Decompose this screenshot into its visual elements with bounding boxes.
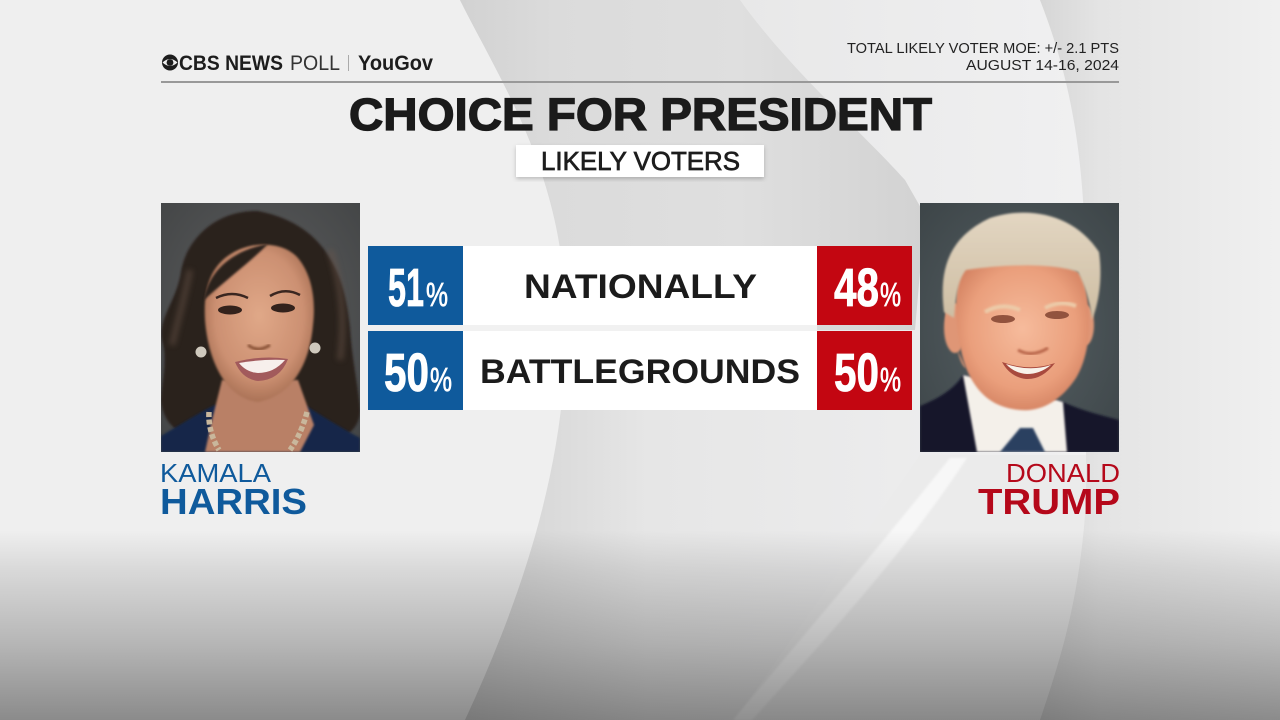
Trump national result (817, 246, 912, 325)
candidate name: Donald Trump: TRUMP (978, 481, 1120, 522)
poll details (847, 41, 1119, 74)
candidate name: Kamala Harris (160, 458, 307, 522)
CBS News label: CBS NEWS (179, 52, 283, 75)
Harris battleground result: 50 (384, 343, 429, 403)
row: battlegrounds (368, 331, 912, 410)
title: CHOICE FOR PRESIDENT (349, 89, 932, 140)
candidate name: Donald Trump (978, 458, 1120, 522)
Harris national result (368, 246, 463, 325)
Trump battleground result: % (880, 361, 901, 398)
Harris battleground result (368, 331, 463, 410)
Trump national result: % (880, 276, 901, 313)
icon: CBS eye (162, 54, 178, 70)
poll details: AUGUST 14-16, 2024 (966, 58, 1119, 74)
candidate name: Kamala Harris: KAMALA (160, 458, 272, 488)
Harris national result: % (426, 276, 448, 313)
Trump battleground result (817, 331, 912, 410)
Trump battleground result: 50 (834, 343, 879, 403)
subtitle badge: likely voters: LIKELY VOTERS (541, 146, 740, 176)
Harris national result: 51 (388, 258, 424, 318)
Poll label: POLL (290, 52, 340, 75)
row label: nationally: NATIONALLY (524, 268, 757, 306)
portrait: Donald Trump (920, 203, 1119, 452)
portrait: Kamala Harris (161, 203, 360, 452)
Harris battleground result: % (430, 361, 452, 398)
header logo: CBS News Poll and YouGov (162, 52, 433, 75)
results table (368, 246, 912, 410)
candidate name: Donald Trump: DONALD (1006, 458, 1120, 488)
Trump national result: 48 (834, 258, 879, 318)
candidate name: Kamala Harris: HARRIS (160, 481, 307, 522)
row label: battlegrounds: BATTLEGROUNDS (480, 353, 800, 391)
row: nationally (368, 246, 912, 325)
poll details: TOTAL LIKELY VOTER MOE: +/- 2.1 PTS (847, 41, 1119, 57)
YouGov label: YouGov (358, 52, 433, 75)
